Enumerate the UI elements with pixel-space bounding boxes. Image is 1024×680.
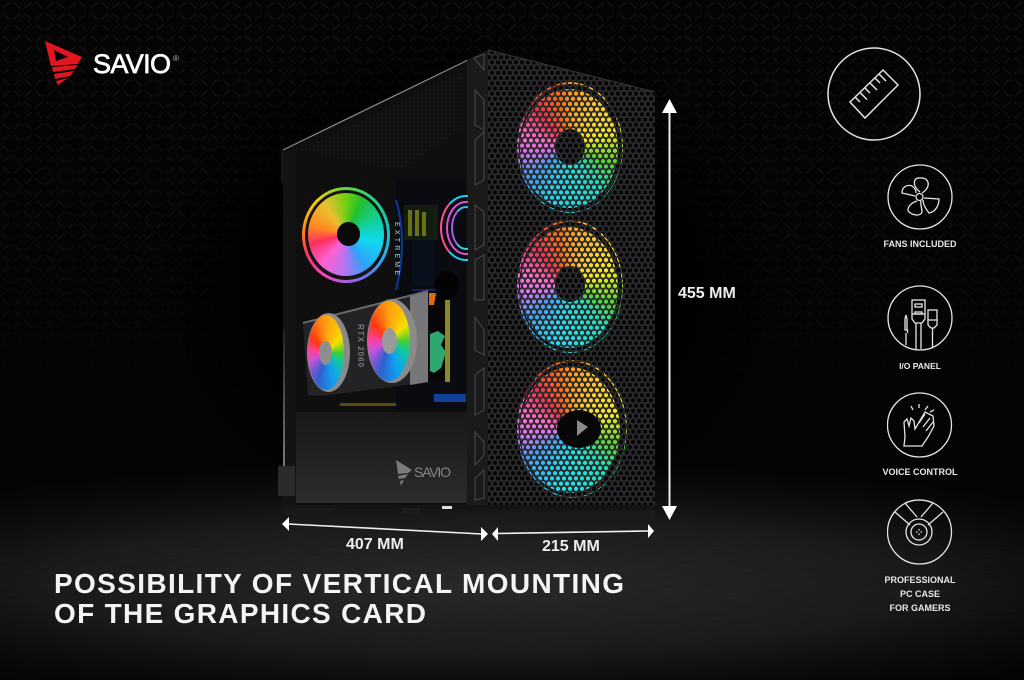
- graphics card: [303, 290, 428, 396]
- label: FANS INCLUDED: [883, 239, 956, 249]
- case side logo: [396, 460, 451, 486]
- dimension arrow: width 215 mm: [492, 524, 654, 541]
- case body: [278, 50, 655, 509]
- label: [884, 575, 956, 613]
- heading: [54, 568, 624, 629]
- label: PC CASE: [900, 589, 940, 599]
- label: FOR GAMERS: [889, 603, 950, 613]
- icon: fan: [887, 164, 953, 230]
- feature: professional pc case for gamers: [884, 499, 956, 613]
- width label: 215 MM: [542, 538, 600, 555]
- icon: clapping hands: [887, 392, 952, 458]
- logo mark: red arrow: [45, 41, 82, 85]
- gpu fan left: [307, 313, 350, 392]
- icon: ruler: [827, 47, 921, 141]
- label: PROFESSIONAL: [884, 575, 956, 585]
- front fan top: [517, 82, 623, 213]
- front fan bottom: [517, 360, 627, 498]
- gpu plate: [303, 290, 428, 396]
- pump knob: [435, 271, 459, 299]
- logo wordmark: SAVIO: [93, 49, 171, 79]
- rear fan rgb ring: [440, 195, 468, 261]
- dimension arrow: height 455 mm: [662, 99, 677, 520]
- label: I/O PANEL: [899, 361, 941, 371]
- logo: savio: [45, 41, 179, 85]
- gpu plate: RTX 2060: [356, 324, 365, 368]
- logo registered mark: ®: [173, 54, 179, 63]
- front fan hub with logo: [557, 410, 601, 448]
- feature: fans included: [883, 164, 956, 249]
- label: VOICE CONTROL: [882, 467, 958, 477]
- front mesh and trim: [473, 50, 655, 505]
- height label: 455 MM: [678, 285, 736, 302]
- front fan middle: [517, 220, 623, 353]
- side fan rgb: [302, 187, 390, 283]
- ram and green block: [429, 293, 450, 382]
- extreme vertical label: EXTREME: [393, 222, 400, 275]
- dimension arrow: depth 407 mm: [282, 517, 488, 541]
- heading: OF THE GRAPHICS CARD: [54, 598, 426, 629]
- case side logo: SAVIO: [414, 464, 451, 480]
- feature: voice control: [882, 392, 958, 477]
- feature: i/o panel: [887, 285, 953, 371]
- icon: gamer badge: [887, 499, 952, 565]
- depth label: 407 MM: [346, 536, 404, 553]
- heading: POSSIBILITY OF VERTICAL MOUNTING: [54, 568, 624, 599]
- icon: cables: [887, 285, 953, 351]
- gpu fan right: [367, 299, 417, 383]
- pc case product image: [278, 50, 655, 509]
